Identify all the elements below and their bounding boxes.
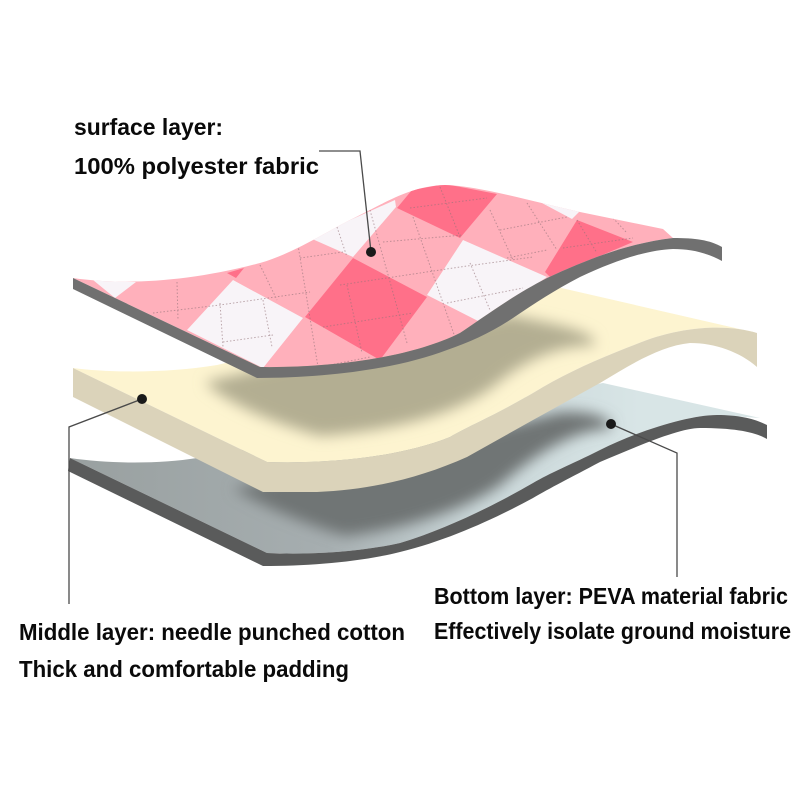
callout leader: surface layer: [319, 151, 376, 257]
surface layer checked fabric: [74, 185, 673, 367]
callout leader: bottom layer: [606, 419, 677, 577]
infographic: three mat layers: [19, 118, 790, 682]
middle layer surface: [73, 287, 757, 462]
quilting stitches: [153, 187, 633, 367]
white checks: [93, 200, 580, 368]
panel: bottom layer: [68, 383, 767, 566]
label: middle layer: Middle layer: needle punched cotton: [19, 619, 405, 645]
bottom layer shadow: [233, 412, 612, 536]
surface layer edge: [73, 238, 722, 378]
label: surface layer: surface layer:: [74, 114, 223, 140]
middle layer edge: [73, 328, 757, 492]
label: surface layer: [74, 114, 319, 179]
panel: middle layer: [73, 287, 757, 492]
bottom layer edge: [68, 415, 767, 566]
callout leader: middle layer: [69, 394, 147, 604]
middle layer shadow: [205, 315, 595, 436]
dark pink checks: [227, 184, 633, 360]
label: middle layer: [19, 619, 405, 682]
label: surface layer: 100% polyester fabric: [74, 153, 319, 179]
bottom layer surface: [70, 383, 760, 554]
label: middle layer: Thick and comfortable padding: [19, 656, 349, 682]
label: bottom layer: [434, 583, 791, 644]
panel: surface layer: [60, 170, 722, 380]
